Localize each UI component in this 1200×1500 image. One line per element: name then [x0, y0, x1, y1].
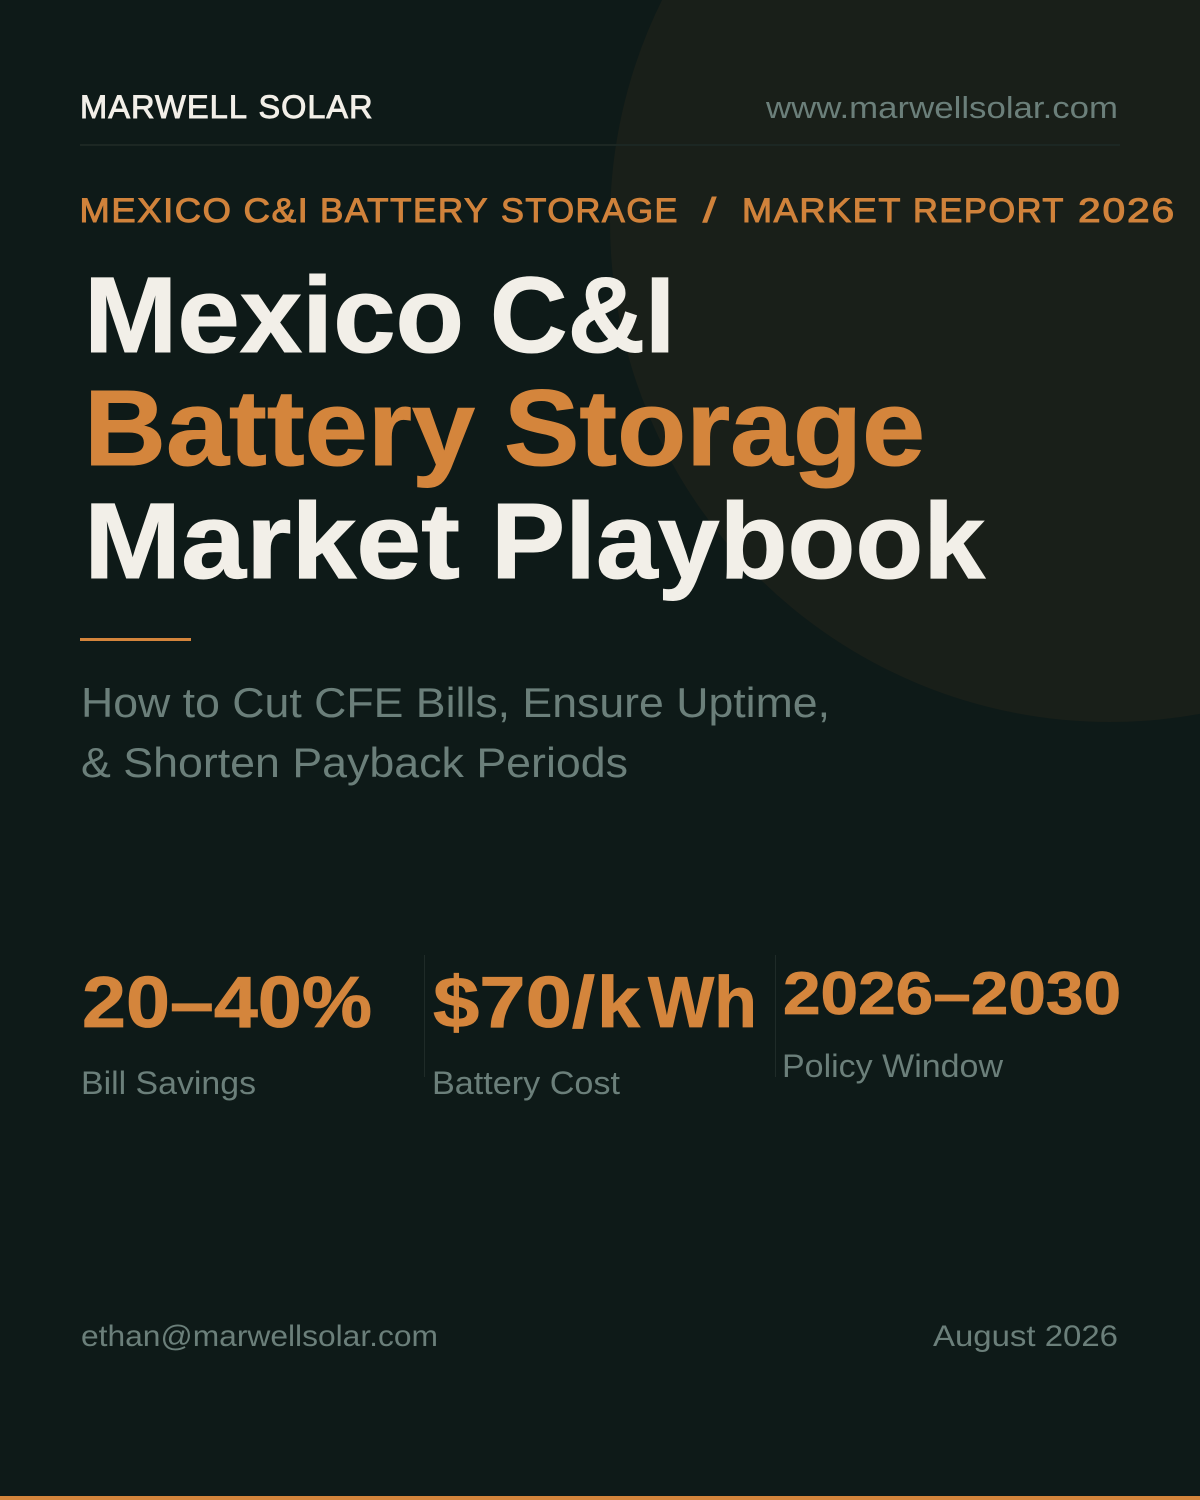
title line 3: Market [84, 480, 460, 601]
eyebrow: REPORT [913, 192, 1065, 230]
website: www.marwellsolar.com [765, 90, 1118, 125]
eyebrow: / [703, 192, 718, 230]
stat: battery cost: $70/ [433, 963, 595, 1043]
footer [81, 1320, 1118, 1353]
stat: bill savings [81, 963, 372, 1101]
subtitle line 1: How to Cut CFE Bills, Ensure Uptime, [81, 679, 830, 726]
stat: bill savings: 20–40% [82, 963, 372, 1043]
stat: battery cost: Battery Cost [432, 1065, 620, 1101]
footer date: August 2026 [933, 1320, 1118, 1353]
brand name: MARWELL [80, 89, 248, 125]
eyebrow [80, 192, 1176, 230]
stat: battery cost: Wh [648, 963, 757, 1043]
accent rule [80, 638, 191, 641]
title [84, 254, 986, 601]
title line 3 [84, 480, 986, 601]
stat: policy window: Policy Window [782, 1048, 1004, 1084]
stat: policy window: 2026–2030 [783, 960, 1121, 1027]
footer email: ethan@marwellsolar.com [81, 1320, 438, 1353]
eyebrow: BATTERY [320, 192, 489, 230]
stats row [81, 955, 1121, 1101]
title line 2: Battery [84, 367, 475, 488]
title line 3: Playbook [491, 480, 986, 601]
stat: policy window [782, 960, 1121, 1084]
brand name: SOLAR [258, 89, 374, 125]
title line 1 [84, 254, 675, 375]
eyebrow: STORAGE [501, 192, 679, 230]
stat: bill savings: Bill Savings [81, 1065, 256, 1101]
title line 1: C&I [490, 254, 675, 375]
eyebrow: MEXICO [80, 192, 232, 230]
eyebrow: C&I [244, 192, 310, 230]
eyebrow: 2026 [1078, 192, 1176, 230]
title line 1: Mexico [84, 254, 464, 375]
header [80, 89, 1118, 125]
brand name [80, 89, 374, 125]
decorative background circle [610, 0, 1200, 722]
stat: battery cost: k [597, 963, 641, 1043]
title line 2 [84, 367, 925, 488]
subtitle line 2: & Shorten Payback Periods [81, 739, 628, 786]
stat: battery cost [432, 963, 757, 1101]
eyebrow: MARKET [742, 192, 902, 230]
title line 2: Storage [504, 367, 925, 488]
bottom accent bar [0, 1496, 1200, 1500]
subtitle [81, 679, 830, 786]
